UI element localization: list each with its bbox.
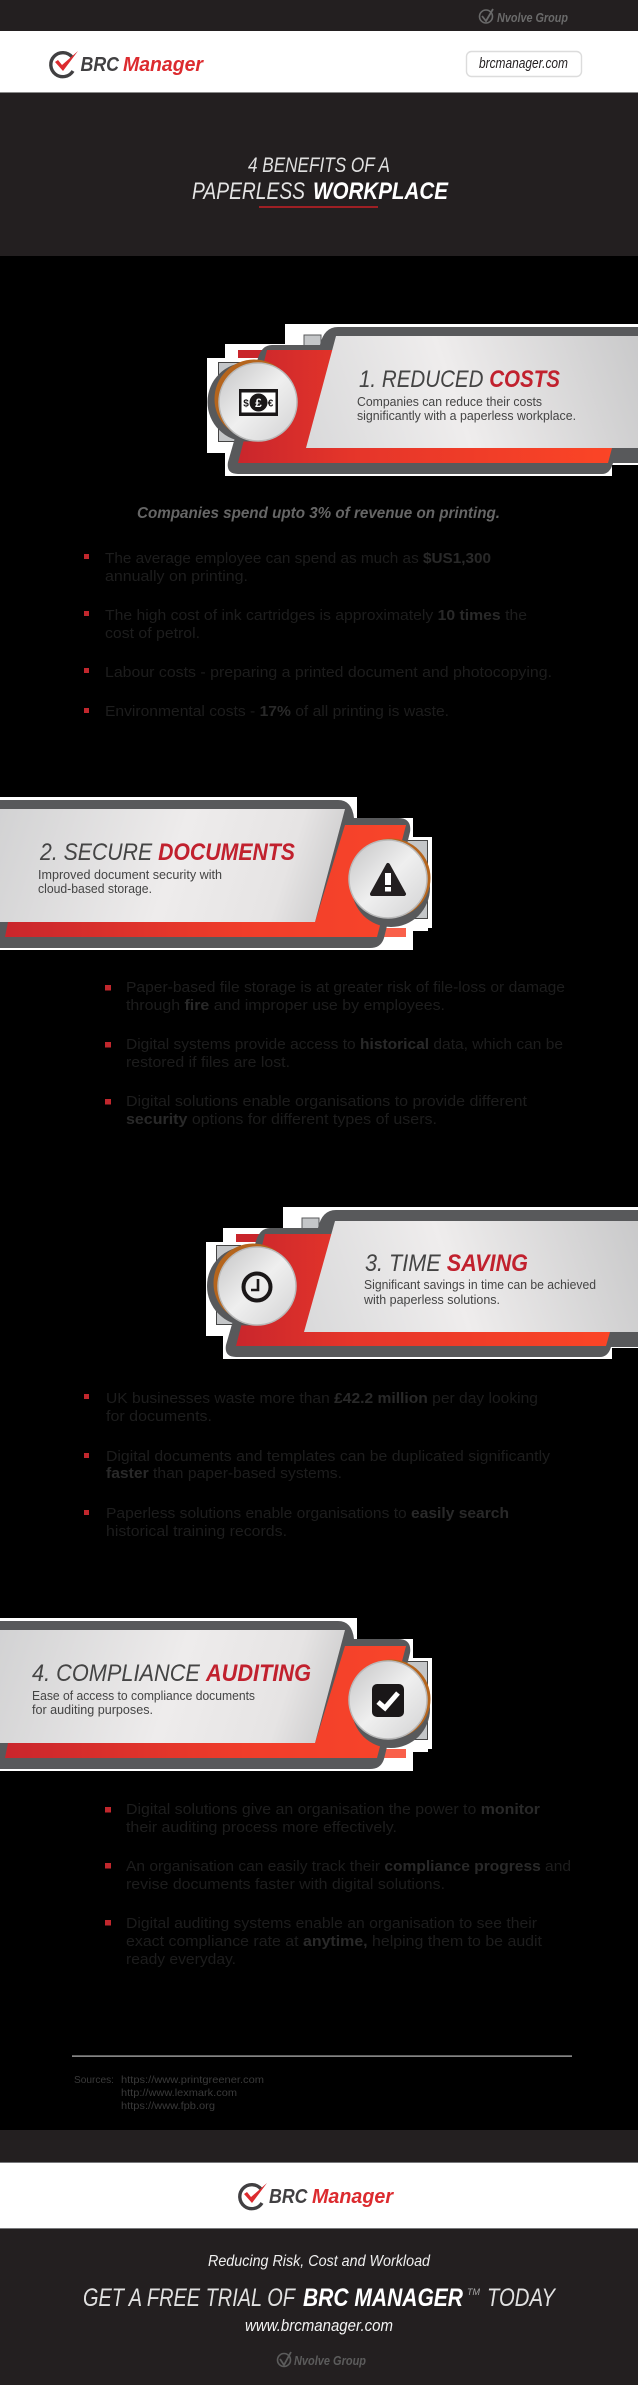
call to action [83,2284,557,2312]
sources: https://www.fpb.org [121,2100,215,2112]
sources: http://www.lexmark.com [121,2087,237,2099]
footer [0,2130,638,2385]
top bar [0,0,638,256]
text block: time bullets: historical training records. [106,1523,287,1540]
logo: Nvolve Group footer [278,2352,366,2368]
text block: compliance bullets: their auditing process more effectively. [126,1819,397,1836]
text block: compliance bullets: An organisation can easily track their compliance progress and [126,1858,571,1875]
logo: Nvolve Group: Nvolve Group [497,10,568,25]
header white band [0,31,638,93]
text block: security bullets [105,979,565,1128]
description: Ease of access to compliance documents [32,1688,255,1703]
website: www.brcmanager.com [245,2316,393,2335]
icon: clock [207,1244,296,1326]
heading: 1. REDUCED COSTS [359,366,560,393]
logo: BRC Manager: BRC [80,54,119,76]
text block: security bullets: Digital solutions enable organisations to provide different [126,1093,528,1110]
heading: 4. COMPLIANCE AUDITING [32,1660,311,1687]
text block: time bullets: for documents. [106,1408,212,1425]
heading: 3. TIME SAVING [365,1250,528,1277]
text block: security bullets: Digital systems provide access to historical data, which can be [126,1036,563,1053]
icon: banknote: $ [243,398,249,410]
text block: costs bullets [84,550,552,720]
text block: costs bullets: The high cost of ink cartridges is approximately 10 times the [105,607,527,624]
sources: https://www.printgreener.com [121,2074,264,2086]
text block: time bullets: Digital documents and templates can be duplicated significantly [106,1448,551,1465]
title: 4 BENEFITS OF A [248,154,390,177]
text block: time bullets: Paperless solutions enable organisations to easily search [106,1505,509,1522]
logo: BRC Manager [51,51,204,77]
text block: compliance bullets: Digital auditing systems enable an organisation to see their [126,1915,537,1932]
website button: brcmanager.com [479,55,568,72]
text block: time bullets [84,1390,551,1540]
text block: compliance bullets: Digital solutions give an organisation the power to monitor [126,1801,540,1818]
logo: Nvolve Group footer: Nvolve Group [294,2353,366,2368]
description: Significant savings in time can be achieved [364,1277,596,1292]
logo: BRC Manager: BRC [269,2186,308,2208]
text block: security bullets: security options for different types of users. [126,1111,437,1128]
title [192,154,449,208]
title: PAPERLESS [192,178,305,205]
logo: BRC Manager [240,2183,394,2209]
text block: costs bullets: The average employee can spend as much as $US1,300 [105,550,491,567]
description [357,394,576,423]
description: significantly with a paperless workplace. [357,408,576,423]
description: for auditing purposes. [32,1702,153,1717]
icon: banknote: € [268,398,274,410]
website button [466,52,582,76]
tagline: Reducing Risk, Cost and Workload [208,2253,431,2270]
text block: time bullets: faster than paper-based systems. [106,1465,342,1482]
main black background [0,256,638,2130]
icon: banknote: £ [255,396,262,410]
icon: check box [349,1660,430,1748]
text block: costs bullets: cost of petrol. [105,625,200,642]
description: Improved document security with [38,867,222,882]
heading: 2. SECURE DOCUMENTS [39,839,295,866]
footer white band [0,2162,638,2229]
call to action: TM [467,2287,480,2297]
text block: costs bullets: Environmental costs - 17% of all printing is waste. [105,703,449,720]
call to action: BRC MANAGER [303,2284,463,2312]
icon: banknote [208,360,297,442]
description: cloud-based storage. [38,881,152,896]
logo: Nvolve Group [480,9,568,25]
text block: security bullets: restored if files are lost. [126,1054,290,1071]
banner 3: time saving [206,1207,638,1359]
text block: compliance bullets: revise documents faster with digital solutions. [126,1876,445,1893]
text block: security bullets: Paper-based file storage is at greater risk of file-loss or damage [126,979,565,996]
text block: costs bullets: annually on printing. [105,568,248,585]
text block: security bullets: through fire and improper use by employees. [126,997,445,1014]
description: with paperless solutions. [363,1292,500,1307]
text block: compliance bullets: ready everyday. [126,1951,236,1968]
call to action: GET A FREE TRIAL OF [83,2284,296,2312]
logo: BRC Manager: Manager [312,2186,394,2208]
description: Companies can reduce their costs [357,394,542,409]
sources: Sources: [74,2074,114,2086]
call to action: TODAY [487,2284,557,2312]
icon: warning triangle [349,838,430,927]
text block: costs bullets: Labour costs - preparing a printed document and photocopying. [105,664,552,681]
banner 2: secure documents [0,797,432,950]
description [363,1277,596,1307]
banner 4: compliance auditing [0,1618,432,1771]
title: WORKPLACE [313,178,449,205]
description [32,1688,255,1717]
banner 1: reduced costs [207,324,638,476]
sources [74,2074,264,2112]
callout: revenue on printing: Companies spend upto 3% of revenue on printing. [137,505,500,522]
description [38,867,222,896]
text block: compliance bullets: exact compliance rate at anytime, helping them to be audit [126,1933,543,1950]
text block: compliance bullets [105,1801,571,1968]
logo: BRC Manager: Manager [123,54,204,76]
text block: time bullets: UK businesses waste more than £42.2 million per day looking [106,1390,538,1407]
